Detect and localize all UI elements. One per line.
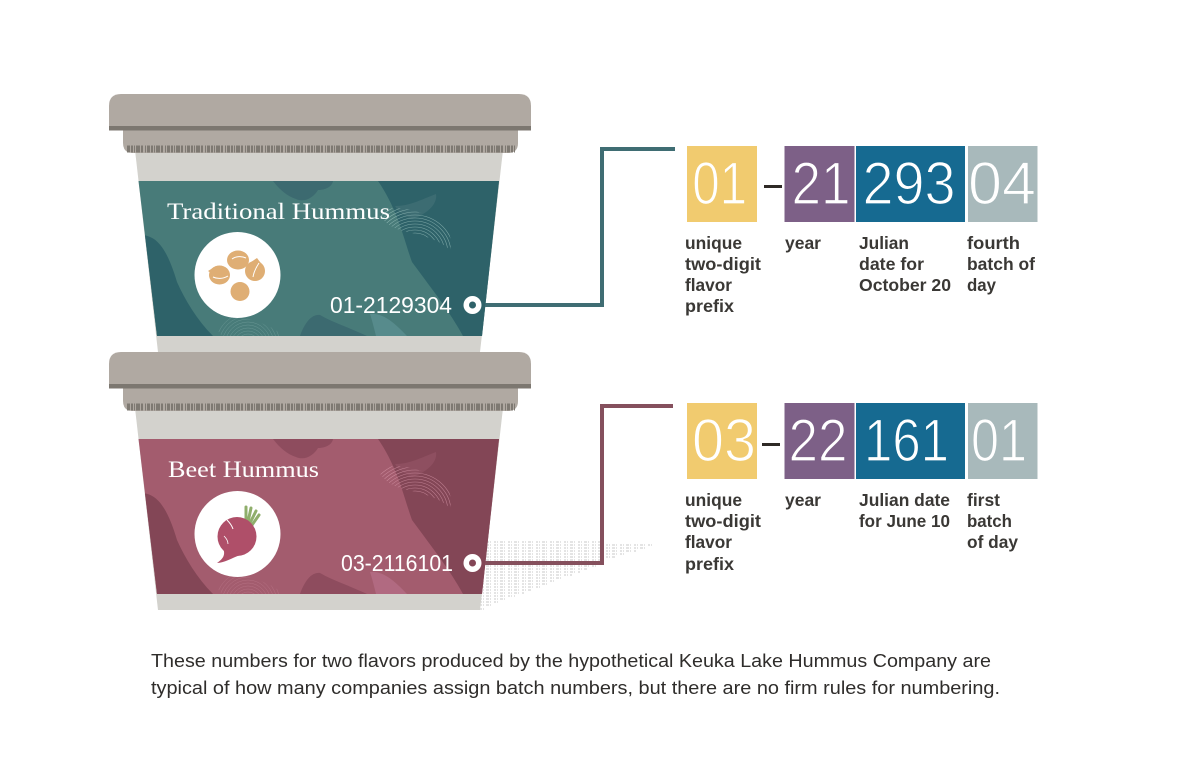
label: flavor prefix: unique: [685, 233, 742, 253]
label band: [138, 439, 499, 594]
batch number breakdown: second row: [685, 403, 1038, 574]
label: flavor prefix: unique: [685, 490, 742, 510]
flavor name: Beet Hummus: [168, 457, 319, 483]
digit box: batch: 04: [968, 150, 1036, 217]
digit box: Julian date: 161: [864, 407, 949, 474]
caption: These numbers for two flavors produced by the hypothetical Keuka Lake Hummus Company are: [151, 650, 991, 671]
code marker dot: [464, 296, 482, 314]
digit box: batch: 01: [971, 407, 1027, 474]
label: batch: fourth: [967, 233, 1020, 253]
icon: beet: [194, 491, 280, 577]
label: batch: batch: [967, 511, 1012, 531]
label: flavor prefix: two-digit: [685, 254, 761, 274]
label: Julian date: Julian date: [859, 490, 950, 510]
label: Julian date: for June 10: [859, 511, 950, 531]
batch number breakdown: first row: [685, 146, 1038, 316]
lid: [109, 352, 531, 411]
label: flavor prefix: flavor: [685, 532, 732, 552]
connector line: maroon: [484, 406, 673, 563]
lid: [109, 94, 531, 153]
tub: Traditional Hummus: [109, 94, 531, 377]
label: flavor prefix: two-digit: [685, 511, 761, 531]
label: Julian date: Julian: [859, 233, 909, 253]
dash: [762, 443, 780, 446]
digit box: flavor prefix: 03: [692, 407, 756, 474]
tub body: [135, 408, 503, 610]
tub: Beet Hummus: [109, 352, 531, 635]
digit box: flavor prefix: 01: [692, 150, 747, 217]
digit box: year: 21: [792, 150, 850, 217]
label: batch: day: [967, 275, 996, 295]
label: batch: batch of: [967, 254, 1035, 274]
digit box: Julian date: 293: [862, 150, 956, 217]
code marker dot: [464, 554, 482, 572]
label: batch: first: [967, 490, 1000, 510]
icon: chickpeas: [194, 232, 280, 318]
label: flavor prefix: prefix: [685, 296, 734, 316]
label: year: year: [785, 490, 821, 510]
connector line: teal: [484, 149, 675, 305]
digit box: year: 22: [788, 407, 848, 474]
label: flavor prefix: flavor: [685, 275, 732, 295]
flavor name: Traditional Hummus: [167, 199, 390, 225]
dash: [764, 185, 782, 188]
label: Julian date: October 20: [859, 275, 951, 295]
label: batch: of day: [967, 532, 1018, 552]
caption: typical of how many companies assign batch numbers, but there are no firm rules for numbering.: [151, 677, 1000, 698]
tub body: [135, 150, 503, 352]
halftone shadow behind second tub: [480, 542, 654, 609]
label: flavor prefix: prefix: [685, 554, 734, 574]
batch code: 01-2129304: [330, 292, 452, 318]
label: year: year: [785, 233, 821, 253]
label: Julian date: date for: [859, 254, 924, 274]
batch code: 03-2116101: [341, 550, 453, 576]
label band: [138, 181, 499, 336]
